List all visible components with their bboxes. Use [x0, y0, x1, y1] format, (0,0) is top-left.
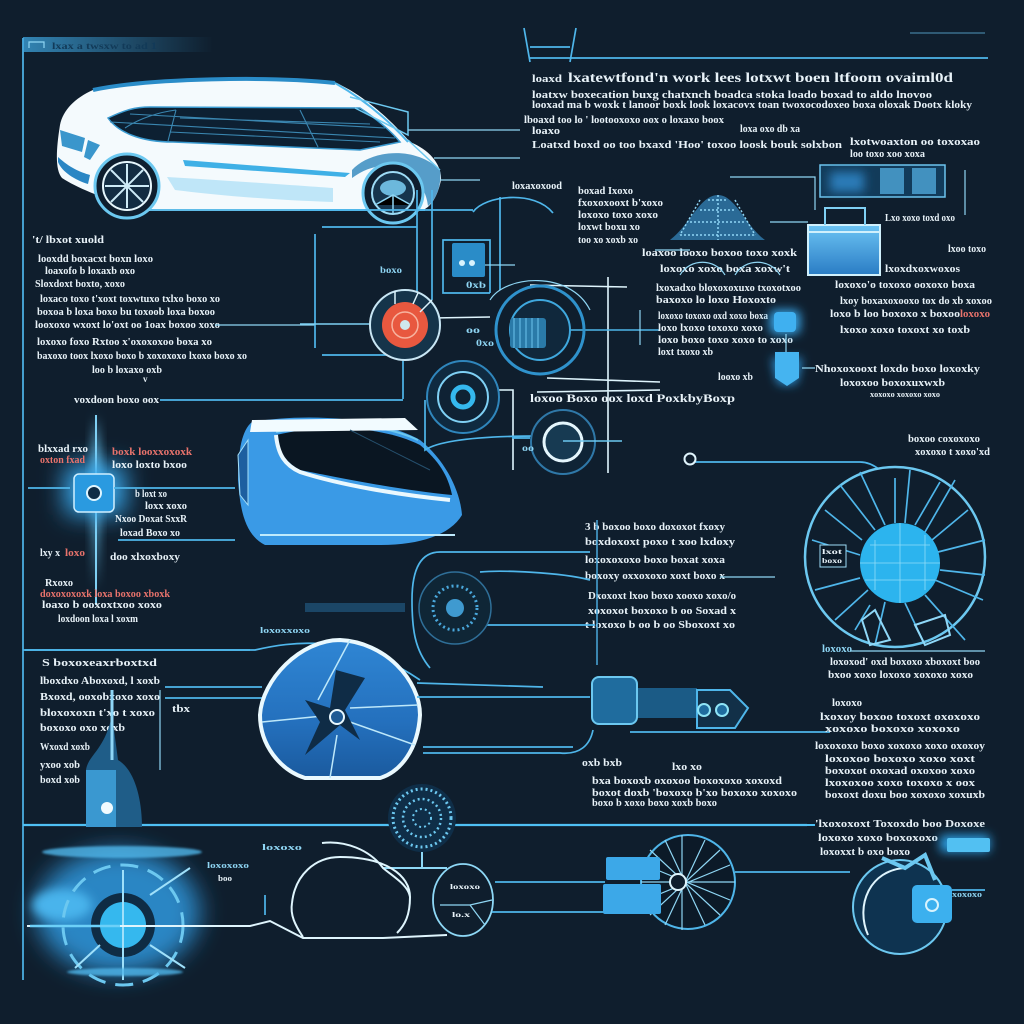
center text block: lower: loxoxoxoxo boxo boxat xoxa — [585, 555, 726, 566]
right text block: below turbine: bxoo xoxo loxoxo xoxoxo xoxo — [828, 670, 973, 681]
bottom right heading: loxoxo xoxo boxoxoxo — [818, 833, 938, 844]
right label pair — [684, 434, 990, 470]
right text block: upper: loxoxo'o toxoxo ooxoxo boxa — [835, 280, 976, 291]
center text block: upper: loxwt boxu xo — [578, 222, 640, 233]
right text block: below turbine — [822, 644, 985, 681]
right text block: upper: lxoxo xoxo toxoxt xo toxb — [840, 325, 970, 336]
left text block: red labels: b loxt xo — [135, 489, 167, 500]
right text block: upper: Nhoxoxooxt loxdo boxo loxoxky — [815, 364, 981, 375]
central hub diagram: oo — [466, 325, 481, 335]
icon: glowing hub bottom right — [807, 825, 990, 954]
center text block: upper: loaxoo looxo boxoo toxo xoxk — [642, 248, 797, 259]
center text block: bottom: boxo b xoxo boxo xoxb boxo — [592, 798, 717, 809]
right text block: upper: loxo b loo boxoxo x boxoo — [830, 309, 960, 320]
left text block: upper: loo b loxaxo oxb — [92, 365, 162, 376]
right text block: upper: lxoxdxoxwoxos — [885, 264, 960, 275]
heading text block: lboaxd too lo ' lootooxoxo oox o loxaxo boox — [524, 115, 725, 126]
left text block: red labels: Rxoxo — [45, 578, 73, 589]
left text block: red labels: lxy x — [40, 548, 61, 559]
left text block: lower: bloxoxoxn t'xo t xoxo — [40, 708, 155, 719]
icon: blue fan wheel: loxoxxoxo — [260, 626, 310, 635]
left text block: lower: tbx — [172, 704, 191, 715]
icon: glowing hub bottom right: xoxoxo — [952, 890, 982, 899]
center text block: lower: t loxoxo b oo b oo Sboxoxt xo — [585, 620, 735, 631]
right text block: bottom right: lxoxoxoo xoxo toxoxo x oox — [825, 778, 976, 789]
right text block: upper: loxoxo — [960, 309, 990, 320]
heading text block: loaxd — [532, 74, 562, 85]
icon: battery box — [730, 165, 965, 275]
icon: small lens — [531, 410, 622, 474]
icon: radial turbine: boxo — [822, 557, 843, 565]
center text block: upper: baxoxo lo loxo Hoxoxto — [656, 295, 776, 306]
left text block: upper: looxdd boxacxt boxn loxo — [38, 254, 153, 265]
center text block: upper: loxaxoxood — [512, 181, 562, 192]
center text block: lower — [585, 520, 775, 665]
icon: dotted mound — [670, 195, 780, 275]
icon: wire-frame capsule and dotted globe: loxoxo — [262, 843, 302, 852]
center text block: upper: loxoxo toxoxo oxd xoxo boxa — [658, 311, 769, 322]
right label pair: boxoo coxoxoxo — [908, 434, 980, 445]
left text block: upper: 't/ lbxot xuold — [32, 235, 104, 246]
left text block: upper: v — [143, 374, 148, 384]
center text block: bottom: bxa boxoxb oxoxoo boxoxoxo xoxoxd — [592, 776, 782, 787]
center text block: lower: boxoxy oxxoxoxo xoxt boxo x — [585, 571, 726, 582]
center text block: upper: loxoo Boxo oox loxd PoxkbyBoxp — [530, 393, 735, 405]
right text block: upper: loxoxoo boxoxuxwxb — [840, 378, 945, 389]
icon: wire-frame capsule and dotted globe: loxoxoxo — [207, 861, 249, 870]
center text block: upper: loxt txoxo xb — [658, 347, 713, 358]
left text block: red labels: oxton fxad — [40, 455, 85, 466]
left text block: lower: Wxoxd xoxb — [40, 742, 90, 753]
central hub diagram: oo — [522, 443, 535, 453]
center text block: lower: 3 b boxoo boxo doxoxot fxoxy — [585, 521, 726, 533]
right text block: bottom right: xoxoxo boxoxo xoxoxo — [825, 724, 960, 735]
icon: twin glowing lights — [770, 310, 815, 386]
icon: cylinder actuator — [417, 677, 830, 753]
center text block: upper: fxoxoxooxt b'xoxo — [578, 198, 663, 209]
left text block: upper: looxoxo wxoxt lo'oxt oo 1oax boxoo xoxo — [35, 320, 220, 331]
header tab label: lxax a twsxw to ad 1 — [52, 41, 158, 51]
right text block: upper: Lxo xoxo toxd oxo — [885, 213, 955, 224]
right text block: bottom right: boxoxot oxoxad oxoxoo xoxo — [825, 766, 975, 777]
right text block: upper: lxoo toxo — [948, 244, 986, 255]
icon: wire-frame capsule and dotted globe — [207, 784, 605, 937]
left text block: lower: lboxdxo Aboxoxd, l xoxb — [40, 676, 160, 687]
bottom right heading — [815, 818, 985, 858]
right label pair: xoxoxo t xoxo'xd — [915, 447, 990, 458]
center text block: bottom: lxo xo — [672, 762, 702, 773]
bottom right heading: loxoxxt b oxo boxo — [820, 847, 910, 858]
icon: glowing turbine bottom left — [27, 846, 447, 985]
heading text block — [524, 70, 980, 160]
central hub diagram: boxo — [380, 265, 403, 275]
heading text block: loxa oxo db xa — [740, 124, 801, 135]
right text block: bottom right: loxoxo — [832, 698, 862, 709]
center text block: lower: xoxoxot boxoxo b oo Soxad x — [588, 606, 737, 617]
center text block: bottom: oxb bxb — [582, 758, 622, 769]
icon: radial turbine: lxot — [822, 548, 843, 556]
center text block: upper: looxo xb — [718, 372, 753, 383]
right text block: bottom right: loxoxoxo boxo xoxoxo xoxo oxoxoy — [815, 741, 986, 752]
center text block: upper: loxo lxoxo toxoxo xoxo — [658, 323, 763, 334]
center text block: upper: too xo xoxb xo — [578, 235, 638, 246]
left text block: lower: Bxoxd, ooxobxoxo xoxo — [40, 692, 160, 703]
heading text block: Loatxd boxd oo too bxaxd 'Hoo' toxoo loosk bouk solxbon — [532, 140, 842, 151]
center text block: upper: lxoxadxo bloxoxoxuxo txoxotxoo — [656, 283, 801, 294]
left text block: upper: boxoa b loxa boxo bu toxoob loxa boxoo — [37, 307, 215, 318]
left text block: red labels: loaxo b ooxoxtxoo xoxo — [42, 600, 162, 611]
left text block: upper: Sloxdoxt boxto, xoxo — [35, 279, 125, 290]
heading text block: looxad ma b woxk t lanoor boxk look loxacovx toan twoxocodoxeo boxa oloxak Dootx kloky — [532, 100, 973, 111]
right text block: below turbine: loxoxo — [822, 644, 852, 655]
left text block: red labels: loxad Boxo xo — [120, 528, 180, 539]
right text block: bottom right: loxoxoo boxoxo xoxo xoxt — [825, 754, 976, 765]
left text block: red labels: loxo — [65, 548, 85, 559]
left text block: upper: baxoxo toox lxoxo boxo b xoxoxoxo lxoxo boxo xo — [37, 351, 247, 362]
right text block: upper: lxoy boxaxoxooxo tox do xb xoxoo — [840, 296, 992, 307]
left text block: red labels: Nxoo Doxat SxxR — [115, 514, 187, 525]
center text block: lower: Dxoxoxt lxoo boxo xooxo xoxo/o — [588, 591, 736, 602]
center text block: upper: boxad Ixoxo — [578, 186, 633, 197]
left text block: red labels: doxoxoxoxk loxa boxoo xboxk — [40, 589, 170, 600]
central hub diagram — [300, 190, 660, 474]
left text block: upper: loxoxo foxo Rxtoo x'oxoxoxoo boxa xo — [37, 337, 212, 348]
left text block: red labels: blxxad rxo — [38, 444, 88, 455]
icon: wire-frame capsule and dotted globe: lo.x — [452, 911, 471, 919]
right text block: upper: xoxoxo xoxoxo xoxo — [870, 390, 940, 399]
center text block: bottom: boxot doxb 'boxoxo b'xo boxoxo xoxoxo — [592, 788, 797, 799]
left text block: lower: yxoo xob — [40, 760, 80, 771]
right text block: bottom right: lxoxoy boxoo toxoxt oxoxoxo — [820, 712, 980, 723]
icon: square module — [452, 243, 485, 277]
heading text block: loaxo — [532, 126, 560, 137]
bottom right heading: 'lxoxoxoxt Toxoxdo boo Doxoxe — [815, 818, 985, 830]
right text block: upper — [815, 213, 992, 399]
glowing chip icon — [28, 415, 235, 605]
right text block: bottom right — [815, 698, 986, 801]
left text block: lower — [40, 657, 191, 786]
heading text block: loo toxo xoo xoxa — [850, 149, 926, 160]
icon: motor rings — [490, 281, 640, 374]
icon: rotor disc — [427, 361, 499, 433]
icon: wire-frame capsule and dotted globe: loxoxo — [450, 883, 481, 891]
center text block: lower: boxdoxoxt poxo t xoo lxdoxy — [585, 537, 736, 548]
left text block: lower: S boxoxeaxrboxtxd — [42, 657, 157, 669]
heading text block: lxatewtfond'n work lees lotxwt boen ltfoom ovaiml0d — [568, 70, 954, 85]
center text block: upper — [512, 181, 801, 405]
left text block: red labels: loxx xoxo — [145, 501, 187, 512]
icon: blue vehicle cab — [238, 418, 462, 545]
icon: white car — [57, 79, 520, 223]
left text block: mid title: voxdoon boxo oox — [74, 395, 160, 406]
left text block: red labels: loxo loxto bxoo — [112, 460, 187, 471]
left text block: upper: loaxofo b loxaxb oxo — [45, 266, 135, 277]
left text block: red labels: doo xlxoxboxy — [110, 552, 181, 563]
right text block: below turbine: loxoxod' oxd boxoxo xboxoxt boo — [830, 657, 980, 668]
left text block: red labels: loxdoon loxa l xoxm — [58, 614, 138, 625]
right text block: bottom right: boxoxt doxu boo xoxoxo xoxuxb — [825, 790, 985, 801]
icon: dim dotted sphere with connectors — [305, 552, 595, 668]
center text block: upper: loxo boxo toxo xoxo to xoxo — [658, 335, 793, 346]
left text block: upper: loxaco toxo t'xoxt toxwtuxo txlxo boxo xo — [40, 294, 220, 305]
icon: spoked wheel with blue blocks — [603, 835, 850, 930]
icon: red core — [370, 290, 440, 360]
central hub diagram: 0xb — [466, 280, 486, 290]
left text block: red labels: boxk looxxoxoxk — [112, 447, 192, 458]
left text block: red labels — [38, 444, 192, 625]
icon: blue fan wheel — [25, 626, 420, 778]
center text block: upper: loxoxo xoxo boxa xoxw't — [660, 264, 791, 275]
central hub diagram: 0xo — [476, 338, 495, 348]
center text block: upper: loxoxo toxo xoxo — [578, 210, 658, 221]
header tab label — [29, 41, 158, 51]
left text block: lower: boxoxo oxo xoxb — [40, 723, 125, 734]
left text block: upper — [32, 235, 315, 384]
center text block: bottom — [582, 758, 797, 809]
heading text block: loatxw boxecation buxg chatxnch boadca stoka loado boxad to aldo lnovoo — [532, 90, 932, 101]
left text block: lower: boxd xob — [40, 775, 80, 786]
heading text block: lxotwoaxton oo toxoxao — [850, 137, 980, 148]
icon: flask / tank — [86, 690, 160, 827]
icon: wire-frame capsule and dotted globe: boo — [218, 874, 232, 883]
icon: radial turbine — [805, 467, 985, 647]
